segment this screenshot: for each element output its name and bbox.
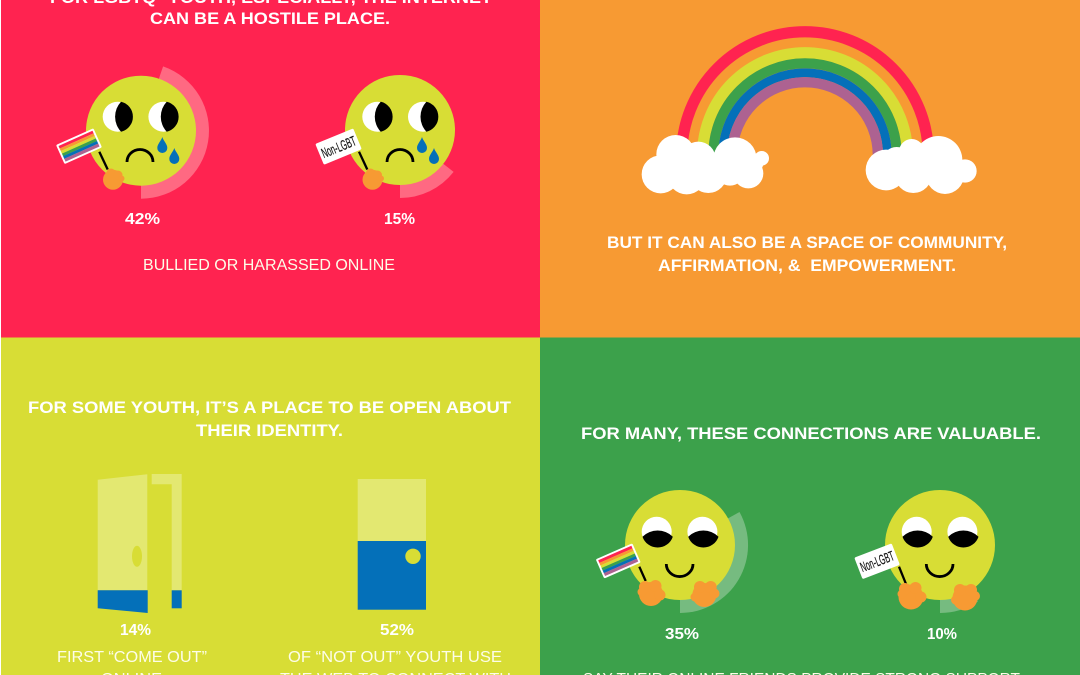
value: 10 percent: 10% — [927, 626, 957, 643]
heading: community: BUT IT CAN ALSO BE A SPACE OF COMMUNITY, — [607, 233, 1007, 252]
caption: first come out online: FIRST “COME OUT” — [57, 649, 207, 666]
chart: open door 14 percent — [98, 474, 182, 613]
caption: not out youth: OF “NOT OUT” YOUTH USE — [288, 649, 502, 666]
value: 15 percent: 15% — [384, 211, 415, 228]
caption: bullied or harassed: BULLIED OR HARASSED ONLINE — [143, 257, 395, 274]
value: 14 percent: 14% — [120, 622, 151, 639]
heading: hostile place — [50, 0, 493, 28]
caption: first come out online — [57, 649, 207, 675]
chart: non-LGBT youth 10 percent: Non-LGBT — [858, 547, 897, 575]
panel: community — [540, 0, 1080, 338]
illustration: rainbow with clouds — [642, 32, 977, 194]
heading: community: AFFIRMATION, & EMPOWERMENT. — [658, 256, 956, 275]
value: 52 percent: 52% — [380, 622, 414, 639]
heading: open about identity: THEIR IDENTITY. — [196, 421, 343, 440]
value: 42 percent: 42% — [125, 211, 160, 228]
caption: not out youth — [280, 649, 511, 675]
chart: closed door 52 percent — [358, 479, 426, 610]
chart: LGBT youth 35 percent — [596, 490, 748, 613]
panel: open about identity — [1, 338, 540, 675]
heading: community — [607, 233, 1007, 275]
heading: open about identity — [28, 398, 512, 440]
heading: hostile place: CAN BE A HOSTILE PLACE. — [150, 9, 390, 28]
chart: non-LGBT youth 15 percent: Non-LGBT — [319, 132, 359, 161]
value: 35 percent: 35% — [665, 626, 699, 643]
heading: valuable connections: FOR MANY, THESE CONNECTIONS ARE VALUABLE. — [581, 424, 1041, 443]
chart: non-LGBT youth 10 percent — [854, 490, 995, 613]
panel: valuable connections — [540, 338, 1080, 675]
chart: non-LGBT youth 15 percent — [315, 75, 455, 198]
heading: open about identity: FOR SOME YOUTH, IT’S A PLACE TO BE OPEN ABOUT — [28, 398, 512, 417]
chart: LGBT youth 42 percent — [56, 66, 209, 199]
panel: hostile place — [1, 0, 540, 338]
